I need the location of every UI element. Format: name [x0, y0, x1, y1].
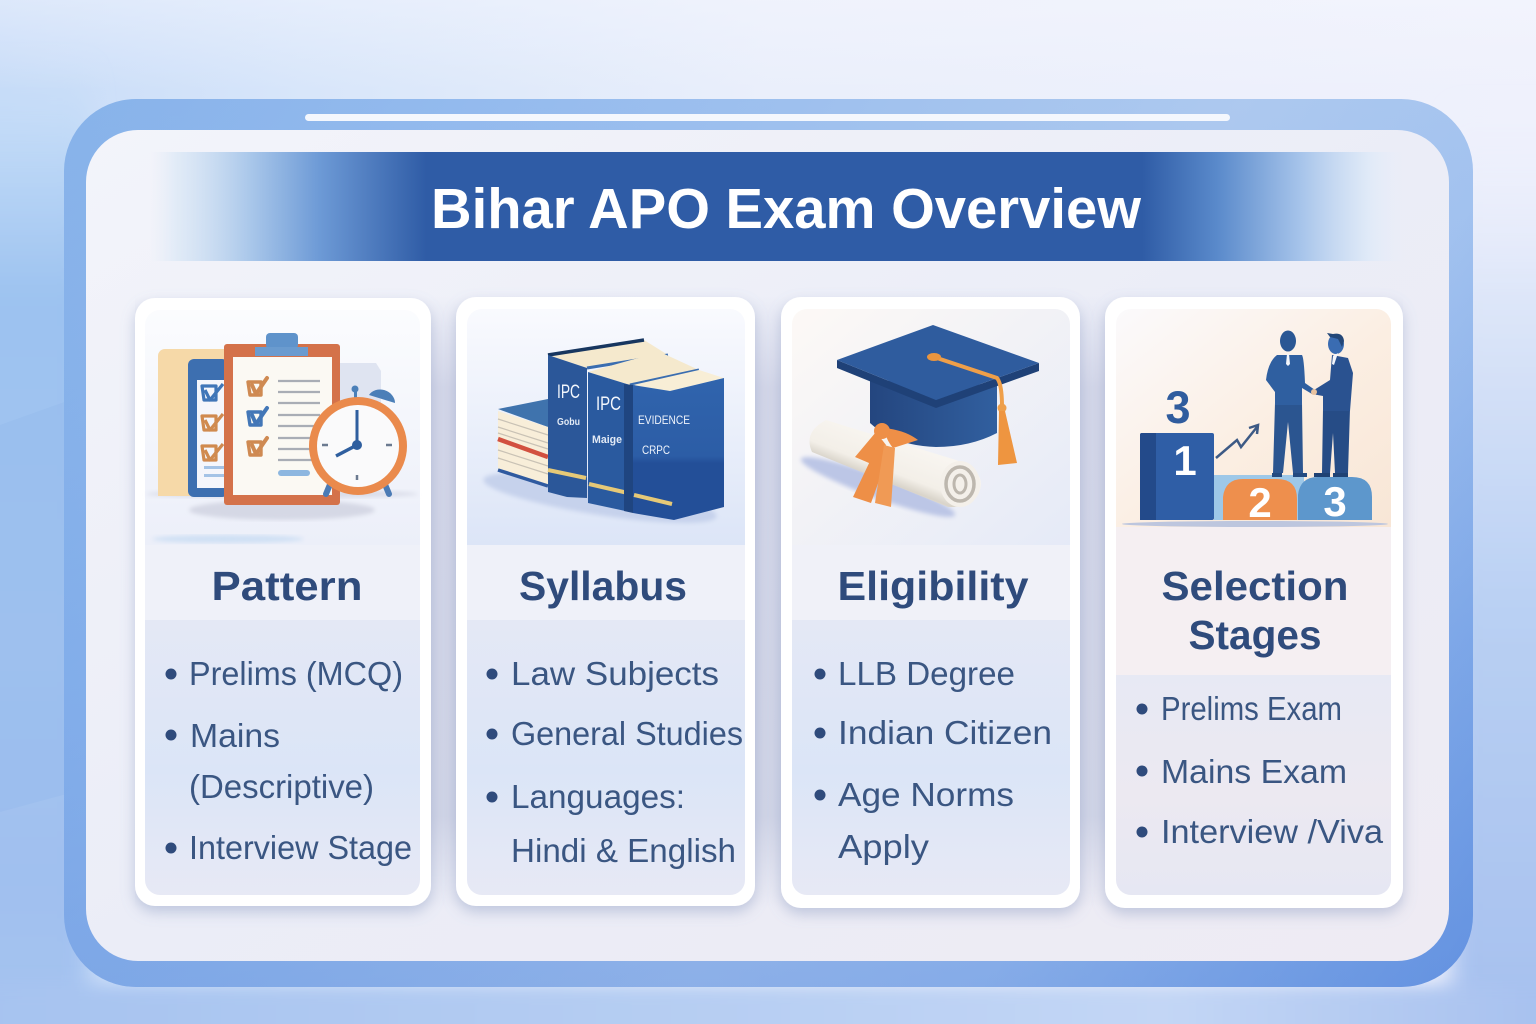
bullet list: Syllabus: Law Subjects	[511, 655, 719, 692]
book: back	[548, 340, 668, 498]
title: Bihar APO Exam Overview	[431, 177, 1142, 241]
bullet list: Syllabus: Languages:	[511, 778, 685, 815]
book: middle: Maige	[592, 434, 622, 446]
podium: 1	[1173, 437, 1197, 484]
icon: clipboard and clock	[146, 333, 418, 543]
bullet list: Selection Stages: Prelims Exam	[1161, 690, 1342, 727]
book: back: Gobu	[557, 417, 580, 428]
heading: Selection Stages	[1162, 563, 1348, 658]
growth arrow	[1216, 425, 1258, 458]
bullet list: Pattern: Prelims (MCQ)	[189, 655, 403, 692]
top highlight bar	[305, 114, 1230, 121]
cap top	[837, 360, 1039, 408]
bullet list: Selection Stages: Mains Exam	[1161, 753, 1347, 790]
outer blue frame	[64, 99, 1473, 987]
bullet list: Syllabus: Hindi & English	[511, 832, 736, 869]
book: back: IPC	[557, 382, 580, 403]
panel: Syllabus	[456, 297, 755, 906]
stacked lying books	[498, 399, 548, 487]
book: middle	[588, 352, 699, 512]
bullet list: Eligibility: Age Norms	[838, 776, 1014, 813]
main inner panel	[86, 130, 1449, 961]
checklist marks	[248, 378, 267, 455]
diploma	[809, 420, 981, 507]
podium: 3	[1323, 478, 1347, 525]
book: front: CRPC	[642, 443, 670, 457]
bullet list: Syllabus: General Studies	[511, 715, 743, 752]
heading: Selection Stages: Selection	[1162, 563, 1348, 609]
cap base	[870, 380, 997, 447]
bullet list: Pattern: (Descriptive)	[189, 768, 374, 805]
heading: Pattern: Pattern	[212, 563, 362, 609]
figure: right person	[1312, 333, 1353, 477]
title banner	[150, 152, 1406, 261]
checklist lines	[278, 381, 320, 460]
shaded gaps between cards	[135, 296, 1403, 908]
bullet list: Eligibility	[814, 655, 1052, 865]
podium	[1140, 433, 1372, 526]
book: front	[624, 370, 724, 520]
bullet list: Eligibility: Apply	[838, 828, 930, 865]
icon: graduation cap and diploma	[797, 325, 1039, 525]
book: front: EVIDENCE	[638, 413, 690, 427]
book: middle: IPC	[596, 394, 621, 415]
panel: Pattern	[135, 298, 431, 906]
bullet list: Eligibility: LLB Degree	[838, 655, 1015, 692]
icon: law books	[481, 340, 724, 533]
figure: left person	[1266, 330, 1315, 477]
rank numeral above podium: 3	[1165, 382, 1191, 433]
heading: Selection Stages: Stages	[1188, 612, 1322, 658]
panel: Selection Stages	[1105, 297, 1403, 908]
icon: alarm clock	[309, 386, 407, 495]
panel: Eligibility	[781, 297, 1080, 908]
bullet list: Syllabus	[486, 655, 743, 869]
ribbon	[853, 423, 918, 507]
bullet list: Pattern: Interview Stage	[189, 829, 412, 866]
icon: podium and handshake	[1122, 330, 1388, 527]
podium: 2	[1248, 479, 1272, 526]
tassel	[934, 357, 1002, 407]
bullet list: Selection Stages: Interview /Viva	[1161, 813, 1384, 850]
bullet list: Eligibility: Indian Citizen	[838, 714, 1052, 751]
bullet list: Pattern: Mains	[190, 717, 280, 754]
bullet list: Selection Stages	[1136, 690, 1384, 850]
heading: Eligibility: Eligibility	[838, 563, 1029, 609]
heading: Syllabus: Syllabus	[519, 563, 687, 609]
bullet list: Pattern	[166, 655, 412, 866]
